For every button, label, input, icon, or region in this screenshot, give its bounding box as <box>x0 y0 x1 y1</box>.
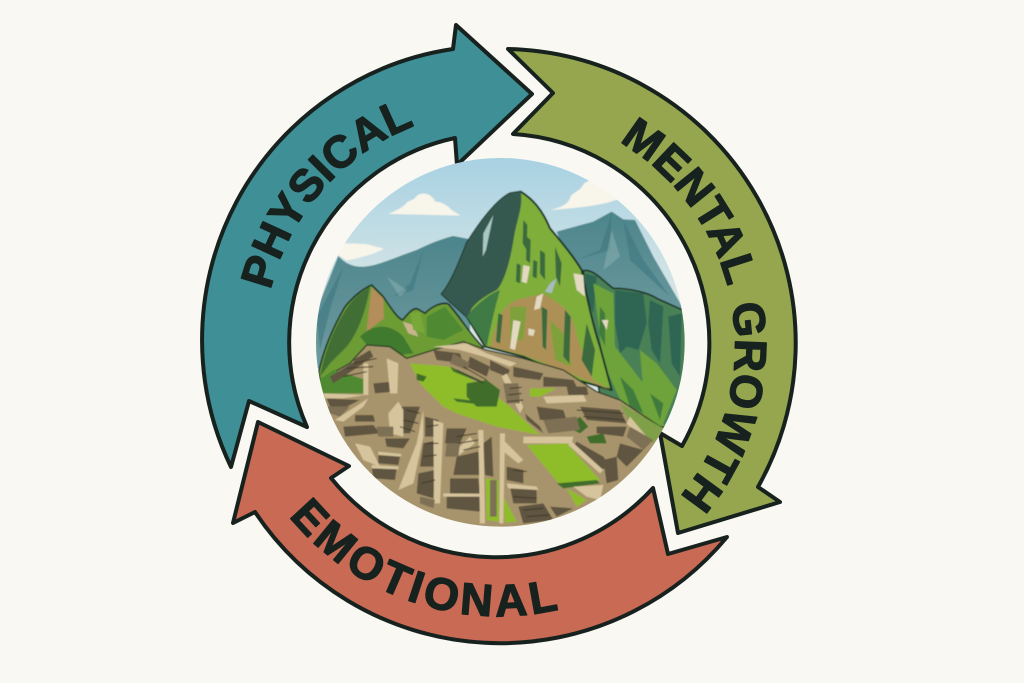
stone terraces: light <box>323 343 647 523</box>
label: physical: PHYSICAL <box>240 104 414 288</box>
huayna picchu peak <box>442 192 612 390</box>
ruins base <box>323 340 664 527</box>
trees and shadows on plazas <box>417 367 607 488</box>
clouds <box>338 180 618 261</box>
terrace lines <box>343 358 625 517</box>
left peak <box>318 285 483 380</box>
illustration: Machu Picchu <box>316 158 685 527</box>
label: mental growth: MENTAL GROWTH <box>621 116 767 514</box>
arrow: emotional <box>231 420 729 646</box>
green plazas <box>410 363 600 523</box>
arrow: mental growth <box>506 47 798 535</box>
stone terraces: mid <box>323 353 653 517</box>
arrow: physical <box>200 22 534 470</box>
far mountains <box>310 236 471 370</box>
stone terraces: dark <box>327 350 643 523</box>
label: emotional: EMOTIONAL <box>290 497 558 618</box>
right ridge <box>582 269 685 426</box>
